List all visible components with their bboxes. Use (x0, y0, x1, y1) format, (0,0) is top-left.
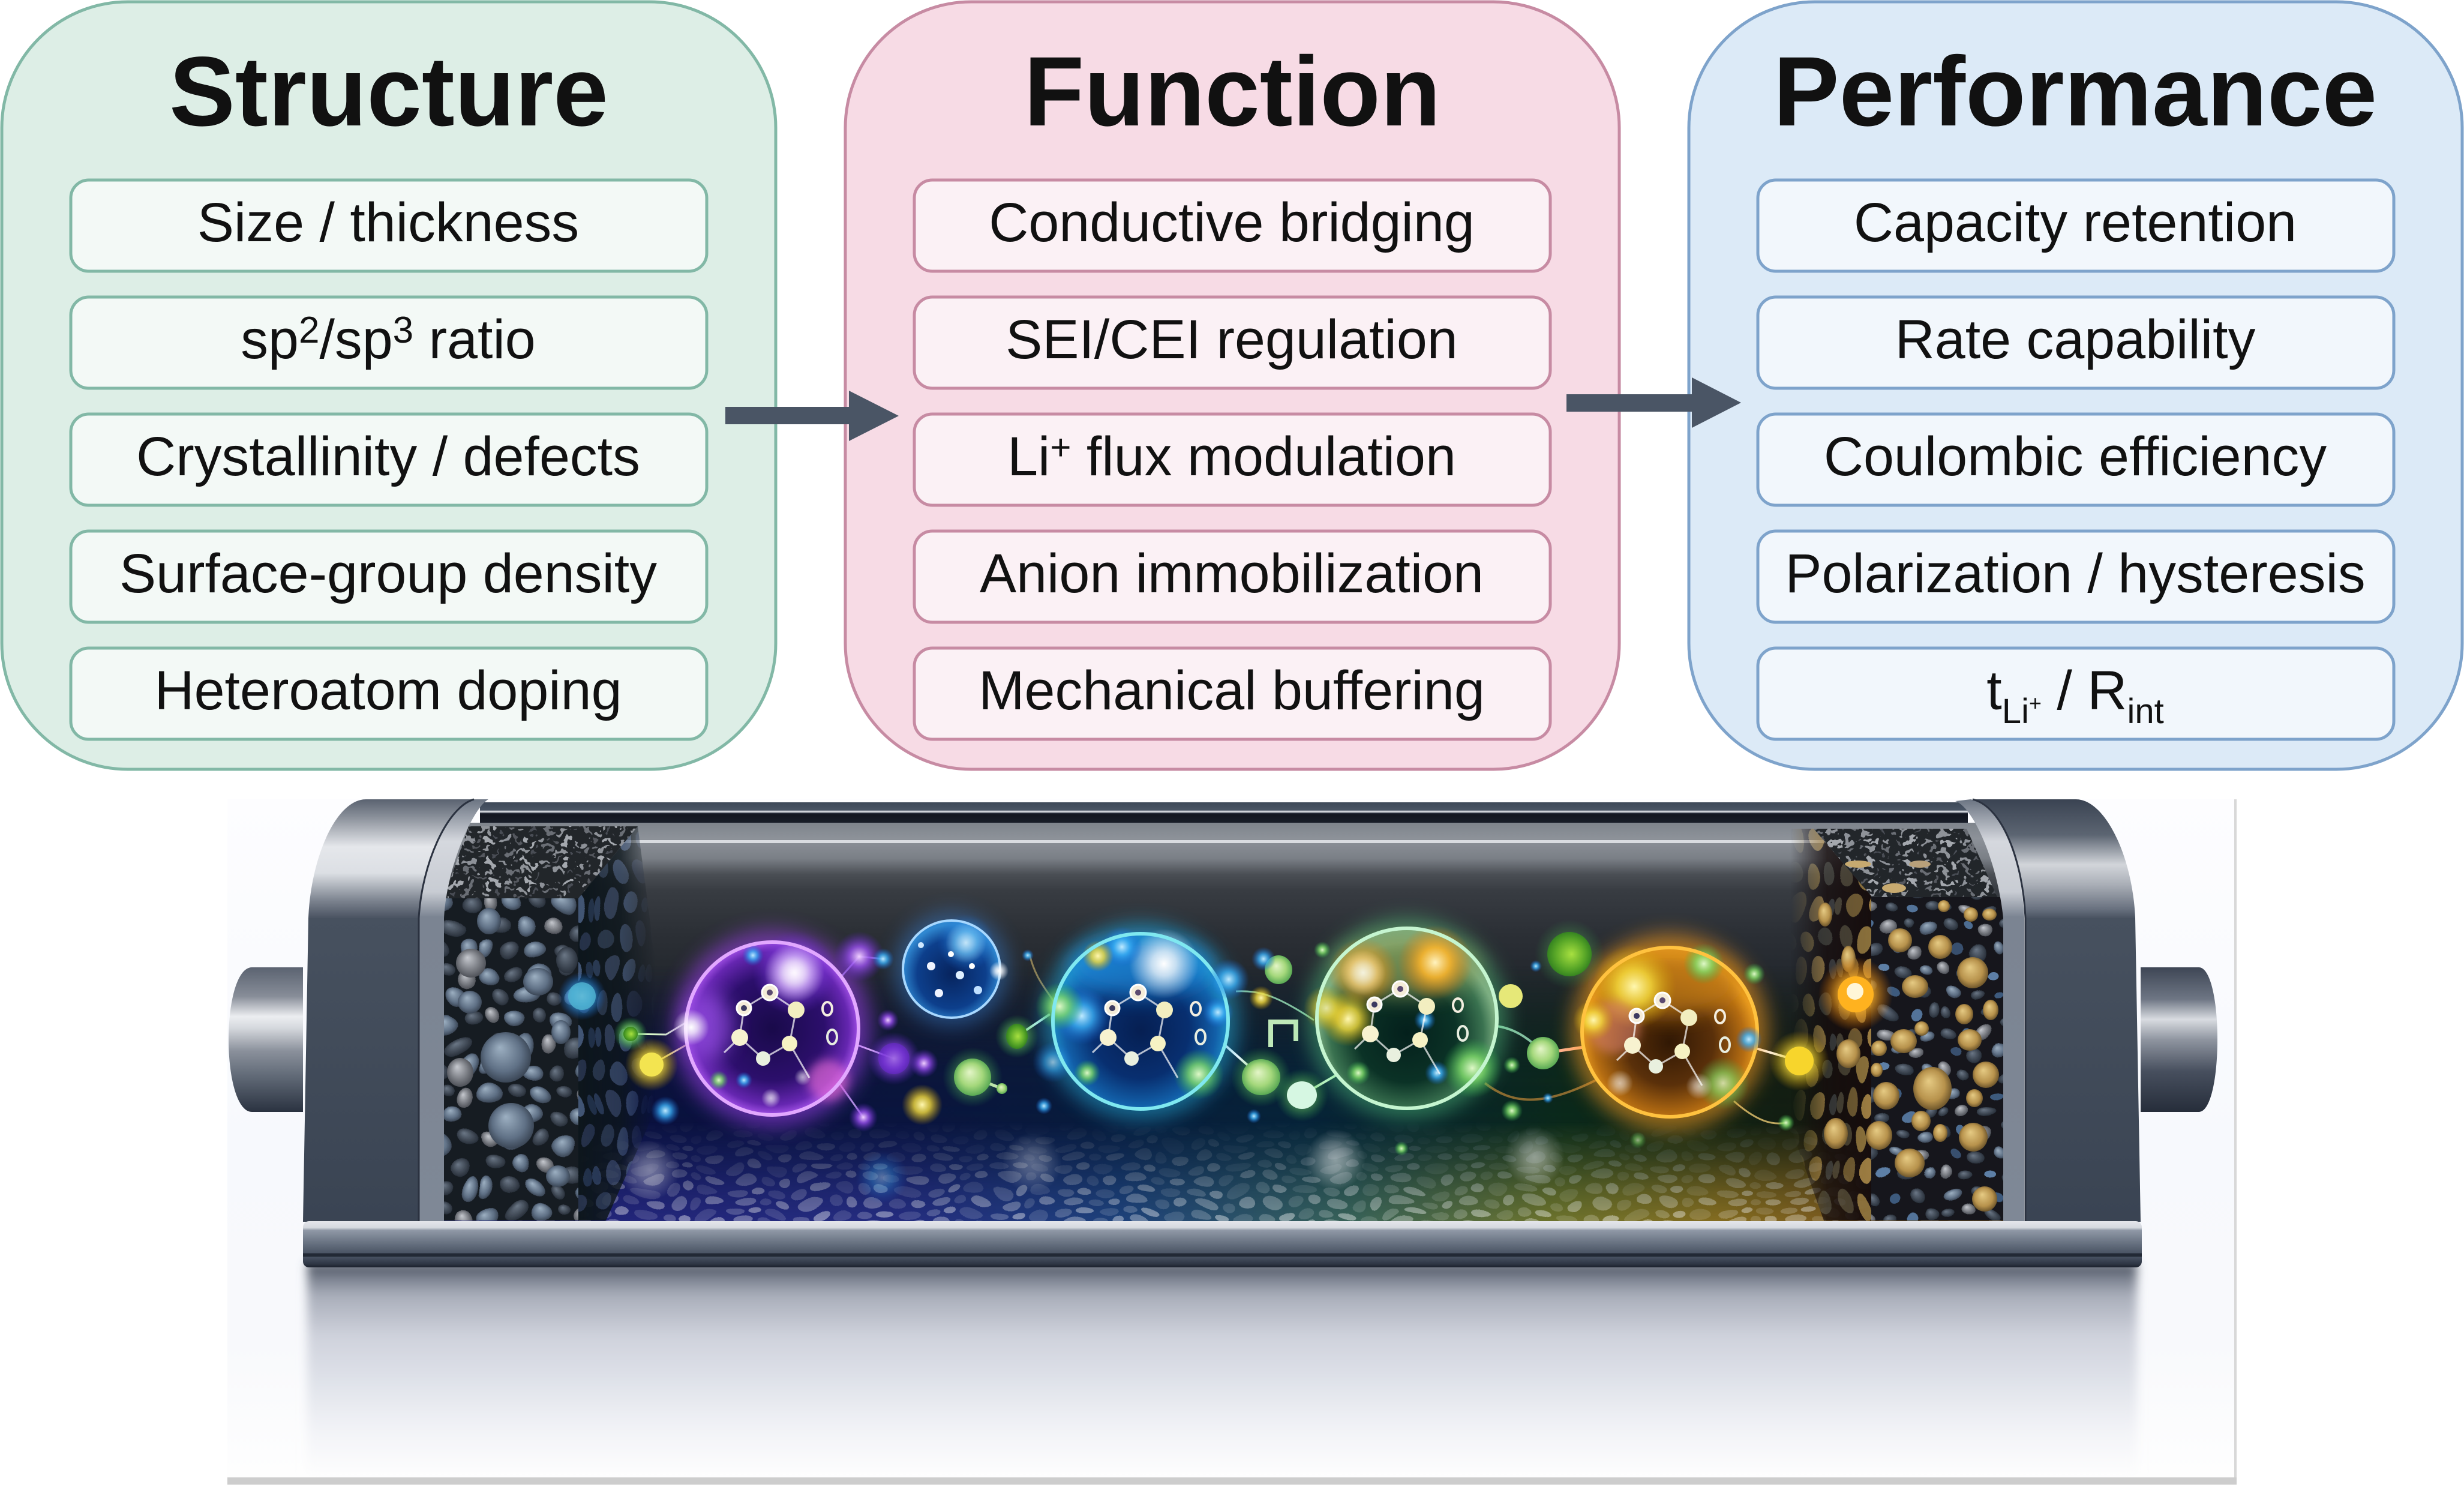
interior chamber (444, 823, 2004, 1222)
item: Anion immobilization (914, 531, 1550, 622)
sphere: small blue (894, 912, 1009, 1027)
item: tLi+ / Rint: Li (2002, 692, 2029, 731)
sphere: purple (673, 930, 871, 1128)
sphere: orange (1571, 933, 1769, 1131)
item: Crystallinity / defects: Crystallinity / defects (136, 426, 640, 487)
item: Heteroatom doping (71, 648, 707, 739)
item: Capacity retention (1758, 180, 2394, 271)
item: Surface-group density (71, 531, 707, 622)
panel: Function (845, 2, 1619, 769)
item: sp2/sp3 ratio: ratio (413, 309, 536, 370)
floor pebbles (444, 1128, 2003, 1221)
item: Li+ flux modulation: Li (1007, 426, 1050, 487)
item: Li+ flux modulation: + (1050, 427, 1071, 467)
item: Heteroatom doping: Heteroatom doping (154, 660, 622, 721)
item: Rate capability: Rate capability (1895, 309, 2256, 370)
terminal: right (2141, 967, 2217, 1112)
item: tLi+ / Rint: int (2127, 692, 2164, 731)
item: tLi+ / Rint: / R (2042, 660, 2127, 721)
item: tLi+ / Rint: + (2029, 691, 2042, 715)
illustration: battery cross-section (227, 792, 2237, 1485)
item: SEI/CEI regulation: SEI/CEI regulation (1006, 309, 1458, 370)
symbol: pale bracket between spheres (1271, 1022, 1296, 1047)
end cap: left (303, 799, 488, 1222)
item: Polarization / hysteresis: Polarization / hysteresis (1785, 543, 2366, 604)
item: Li+ flux modulation (914, 414, 1550, 505)
icon: glowing blue particle on electrode (558, 972, 606, 1020)
item: Conductive bridging (914, 180, 1550, 271)
item: sp2/sp3 ratio: /sp (319, 309, 393, 370)
arrow: Function to Performance (1566, 377, 1741, 428)
item: Mechanical buffering (914, 648, 1550, 739)
connectors between spheres (631, 954, 1799, 1123)
icon: bright orange particle on electrode (1818, 957, 1893, 1032)
item: Rate capability (1758, 297, 2394, 388)
item: Polarization / hysteresis (1758, 531, 2394, 622)
item: Conductive bridging: Conductive bridging (989, 192, 1475, 253)
heading: Structure: Structure (169, 36, 608, 146)
item: Surface-group density: Surface-group density (119, 543, 657, 604)
item: Size / thickness (71, 180, 707, 271)
item: sp2/sp3 ratio: 2 (299, 310, 319, 351)
item: Li+ flux modulation: flux modulation (1071, 426, 1456, 487)
heading: Performance: Performance (1773, 36, 2377, 146)
item: Capacity retention: Capacity retention (1854, 192, 2297, 253)
arrow: Structure to Function (725, 391, 899, 441)
casing: bottom rail (303, 1221, 2142, 1267)
item: Anion immobilization: Anion immobilization (980, 543, 1484, 604)
free particles (614, 919, 1829, 1156)
heading: Function: Function (1024, 36, 1440, 146)
sparkle dust on floor (620, 1127, 1565, 1204)
item: Coulombic efficiency: Coulombic efficiency (1824, 426, 2327, 487)
item: Size / thickness: Size / thickness (197, 192, 579, 253)
end cap: right (1955, 799, 2141, 1222)
item: tLi+ / Rint (1758, 648, 2394, 739)
item: sp2/sp3 ratio (71, 297, 707, 388)
right electrode: gold and dark pebbles (1758, 792, 2040, 1260)
item: Coulombic efficiency (1758, 414, 2394, 505)
terminal: left (229, 967, 303, 1112)
item: sp2/sp3 ratio: sp (241, 309, 299, 370)
item: Crystallinity / defects (71, 414, 707, 505)
item: SEI/CEI regulation (914, 297, 1550, 388)
sphere: blue (1033, 922, 1239, 1120)
item: tLi+ / Rint: t (1986, 660, 2002, 721)
sphere: green (1304, 918, 1508, 1119)
casing: top band (480, 802, 1968, 823)
item: Mechanical buffering: Mechanical buffering (979, 660, 1485, 721)
panel: Structure (2, 2, 776, 769)
item: sp2/sp3 ratio: 3 (393, 310, 413, 351)
panel: Performance (1689, 2, 2462, 769)
left electrode: dark pebbles (408, 792, 696, 1260)
